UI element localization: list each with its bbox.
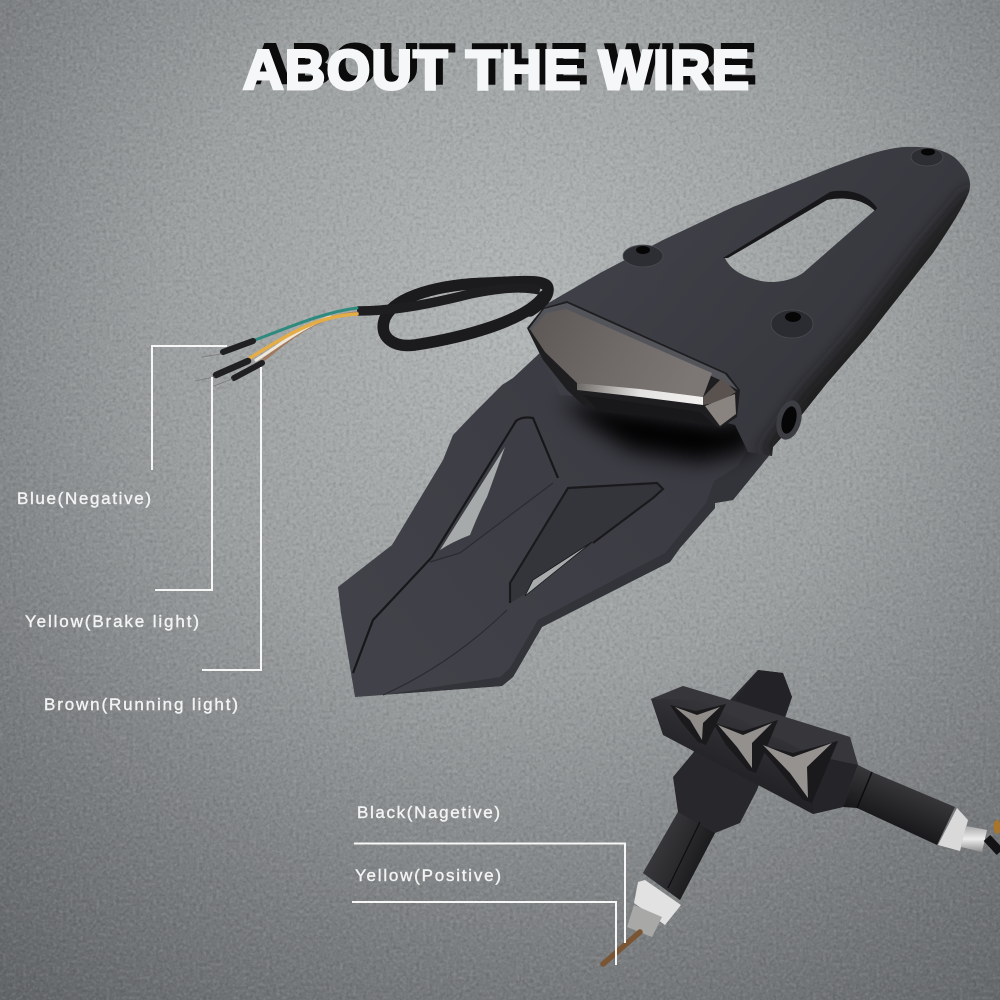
rear signal thread — [627, 905, 662, 937]
front signal neck — [843, 765, 955, 845]
left slot — [440, 447, 505, 550]
LED surround 3 — [757, 741, 838, 803]
left raised panel — [430, 417, 558, 562]
leader lines — [152, 346, 625, 965]
mounting bolt — [911, 148, 943, 166]
front signal leads — [987, 838, 1000, 852]
white wire — [256, 317, 330, 360]
LED arrow 3 — [763, 743, 832, 798]
slot inner rim — [723, 191, 877, 258]
front turn signal — [651, 686, 1000, 852]
rear turn signal — [603, 670, 792, 964]
lower mudguard — [338, 350, 772, 697]
brown wire — [261, 313, 357, 362]
mudguard thick edge — [355, 450, 772, 697]
side mounting hole — [772, 398, 806, 442]
ridge lines — [383, 483, 553, 695]
LED arrow 1 — [675, 707, 720, 740]
LED surround 1 — [670, 704, 726, 745]
front signal nut — [938, 808, 968, 851]
coiled black sheath — [383, 282, 548, 345]
label: black wire: Black(Nagetive) — [357, 803, 500, 822]
label: yellow positive wire: Yellow(Positive) — [355, 866, 501, 885]
LED arrow 2 — [718, 723, 772, 768]
tail light lens — [527, 301, 740, 428]
right slot — [525, 542, 592, 596]
left panel outline — [353, 417, 558, 673]
LED surround 2 — [713, 720, 778, 773]
connector pins — [195, 354, 232, 386]
yellow wire — [250, 314, 357, 358]
right panel outline — [510, 483, 663, 603]
upper mount with slot hole — [528, 147, 970, 456]
rear signal lead — [603, 932, 640, 964]
label: yellow wire: Yellow(Brake light) — [25, 612, 199, 631]
shadow under tail light — [560, 400, 765, 462]
facet — [651, 686, 858, 765]
right raised panel — [510, 483, 663, 603]
front signal thread — [961, 826, 987, 852]
blue connector — [223, 341, 253, 352]
mounting bolt — [623, 245, 663, 267]
label: blue wire: Blue(Negative) — [17, 489, 151, 508]
wire harness — [195, 282, 548, 386]
rear signal neck — [643, 812, 715, 900]
rear signal nut — [634, 880, 681, 925]
yellow connector — [216, 361, 248, 375]
title: ABOUT THE WIRE — [250, 32, 756, 95]
mount right edge shading — [760, 190, 985, 470]
title: ABOUT THE WIRE — [243, 38, 749, 101]
product: turn signals — [603, 670, 1000, 964]
label: brown wire: Brown(Running light) — [44, 695, 238, 714]
mounting bolt — [771, 310, 813, 338]
brown connector — [234, 363, 262, 378]
product: rear fender with tail light — [195, 147, 985, 697]
blue wire — [255, 308, 357, 340]
chrome reflection — [577, 383, 703, 405]
